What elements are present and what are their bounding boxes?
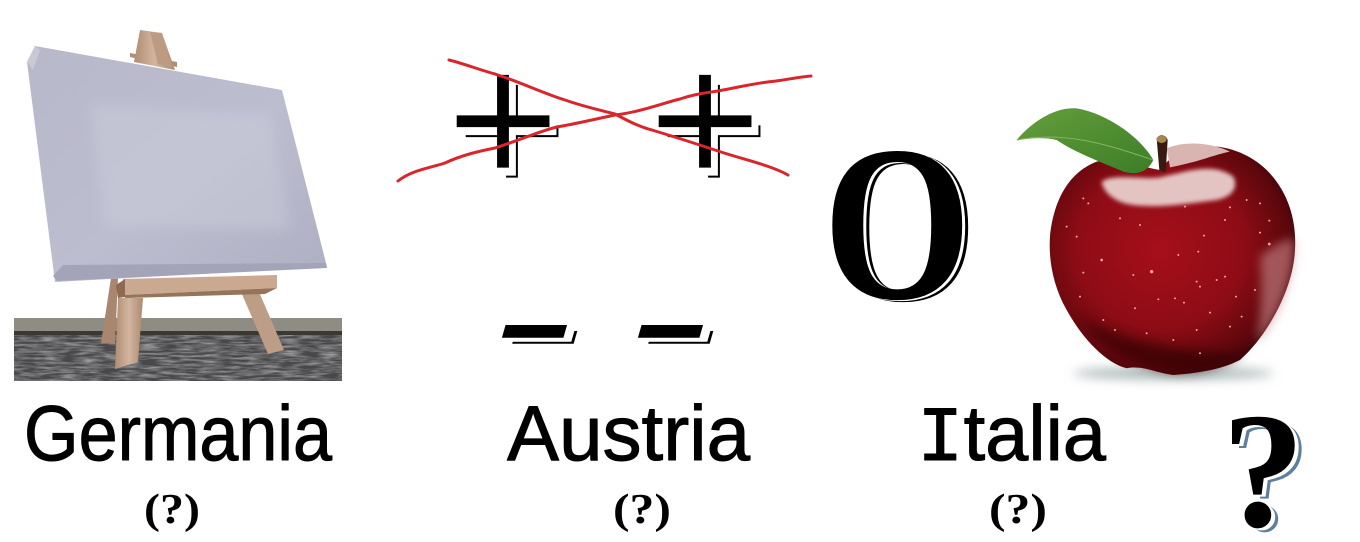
red cross lines [398,60,811,181]
panel: red apple (Italia) [1017,108,1295,379]
Germania question mark: (?) [144,487,200,533]
large letter O: O [823,101,972,346]
label: Italia: Italia [917,389,1107,484]
minus signs [492,260,730,388]
panel: canvas on easel (Germania) [14,30,342,381]
plus signs: + [448,13,558,229]
minus signs: – [638,266,730,388]
large letter O: O [826,102,975,347]
panel: crossed-out plus signs [398,13,811,239]
minus signs: – [499,264,591,386]
easel top [130,30,177,70]
minus signs: – [492,260,583,382]
apple body [1050,144,1295,375]
apple stem [1157,135,1168,173]
minus signs: – [635,264,727,386]
Italia question mark: (?) [989,487,1047,533]
plus signs: + [657,21,767,237]
Austria question mark: (?) [613,487,671,533]
plus signs: + [650,13,760,229]
plus signs: + [455,21,565,237]
table surface [14,318,342,381]
plus signs [448,13,769,239]
minus signs: – [502,266,594,388]
easel legs [101,275,284,369]
label: Austria: Austria [507,389,751,477]
canvas [27,46,327,282]
plus signs: + [457,23,567,239]
apple shadow [1073,367,1273,379]
label: Germania: Germania [24,389,333,477]
large letter O: O [829,103,978,348]
apple leaf [1017,108,1153,173]
plus signs: + [659,23,769,239]
minus signs: – [628,260,719,382]
